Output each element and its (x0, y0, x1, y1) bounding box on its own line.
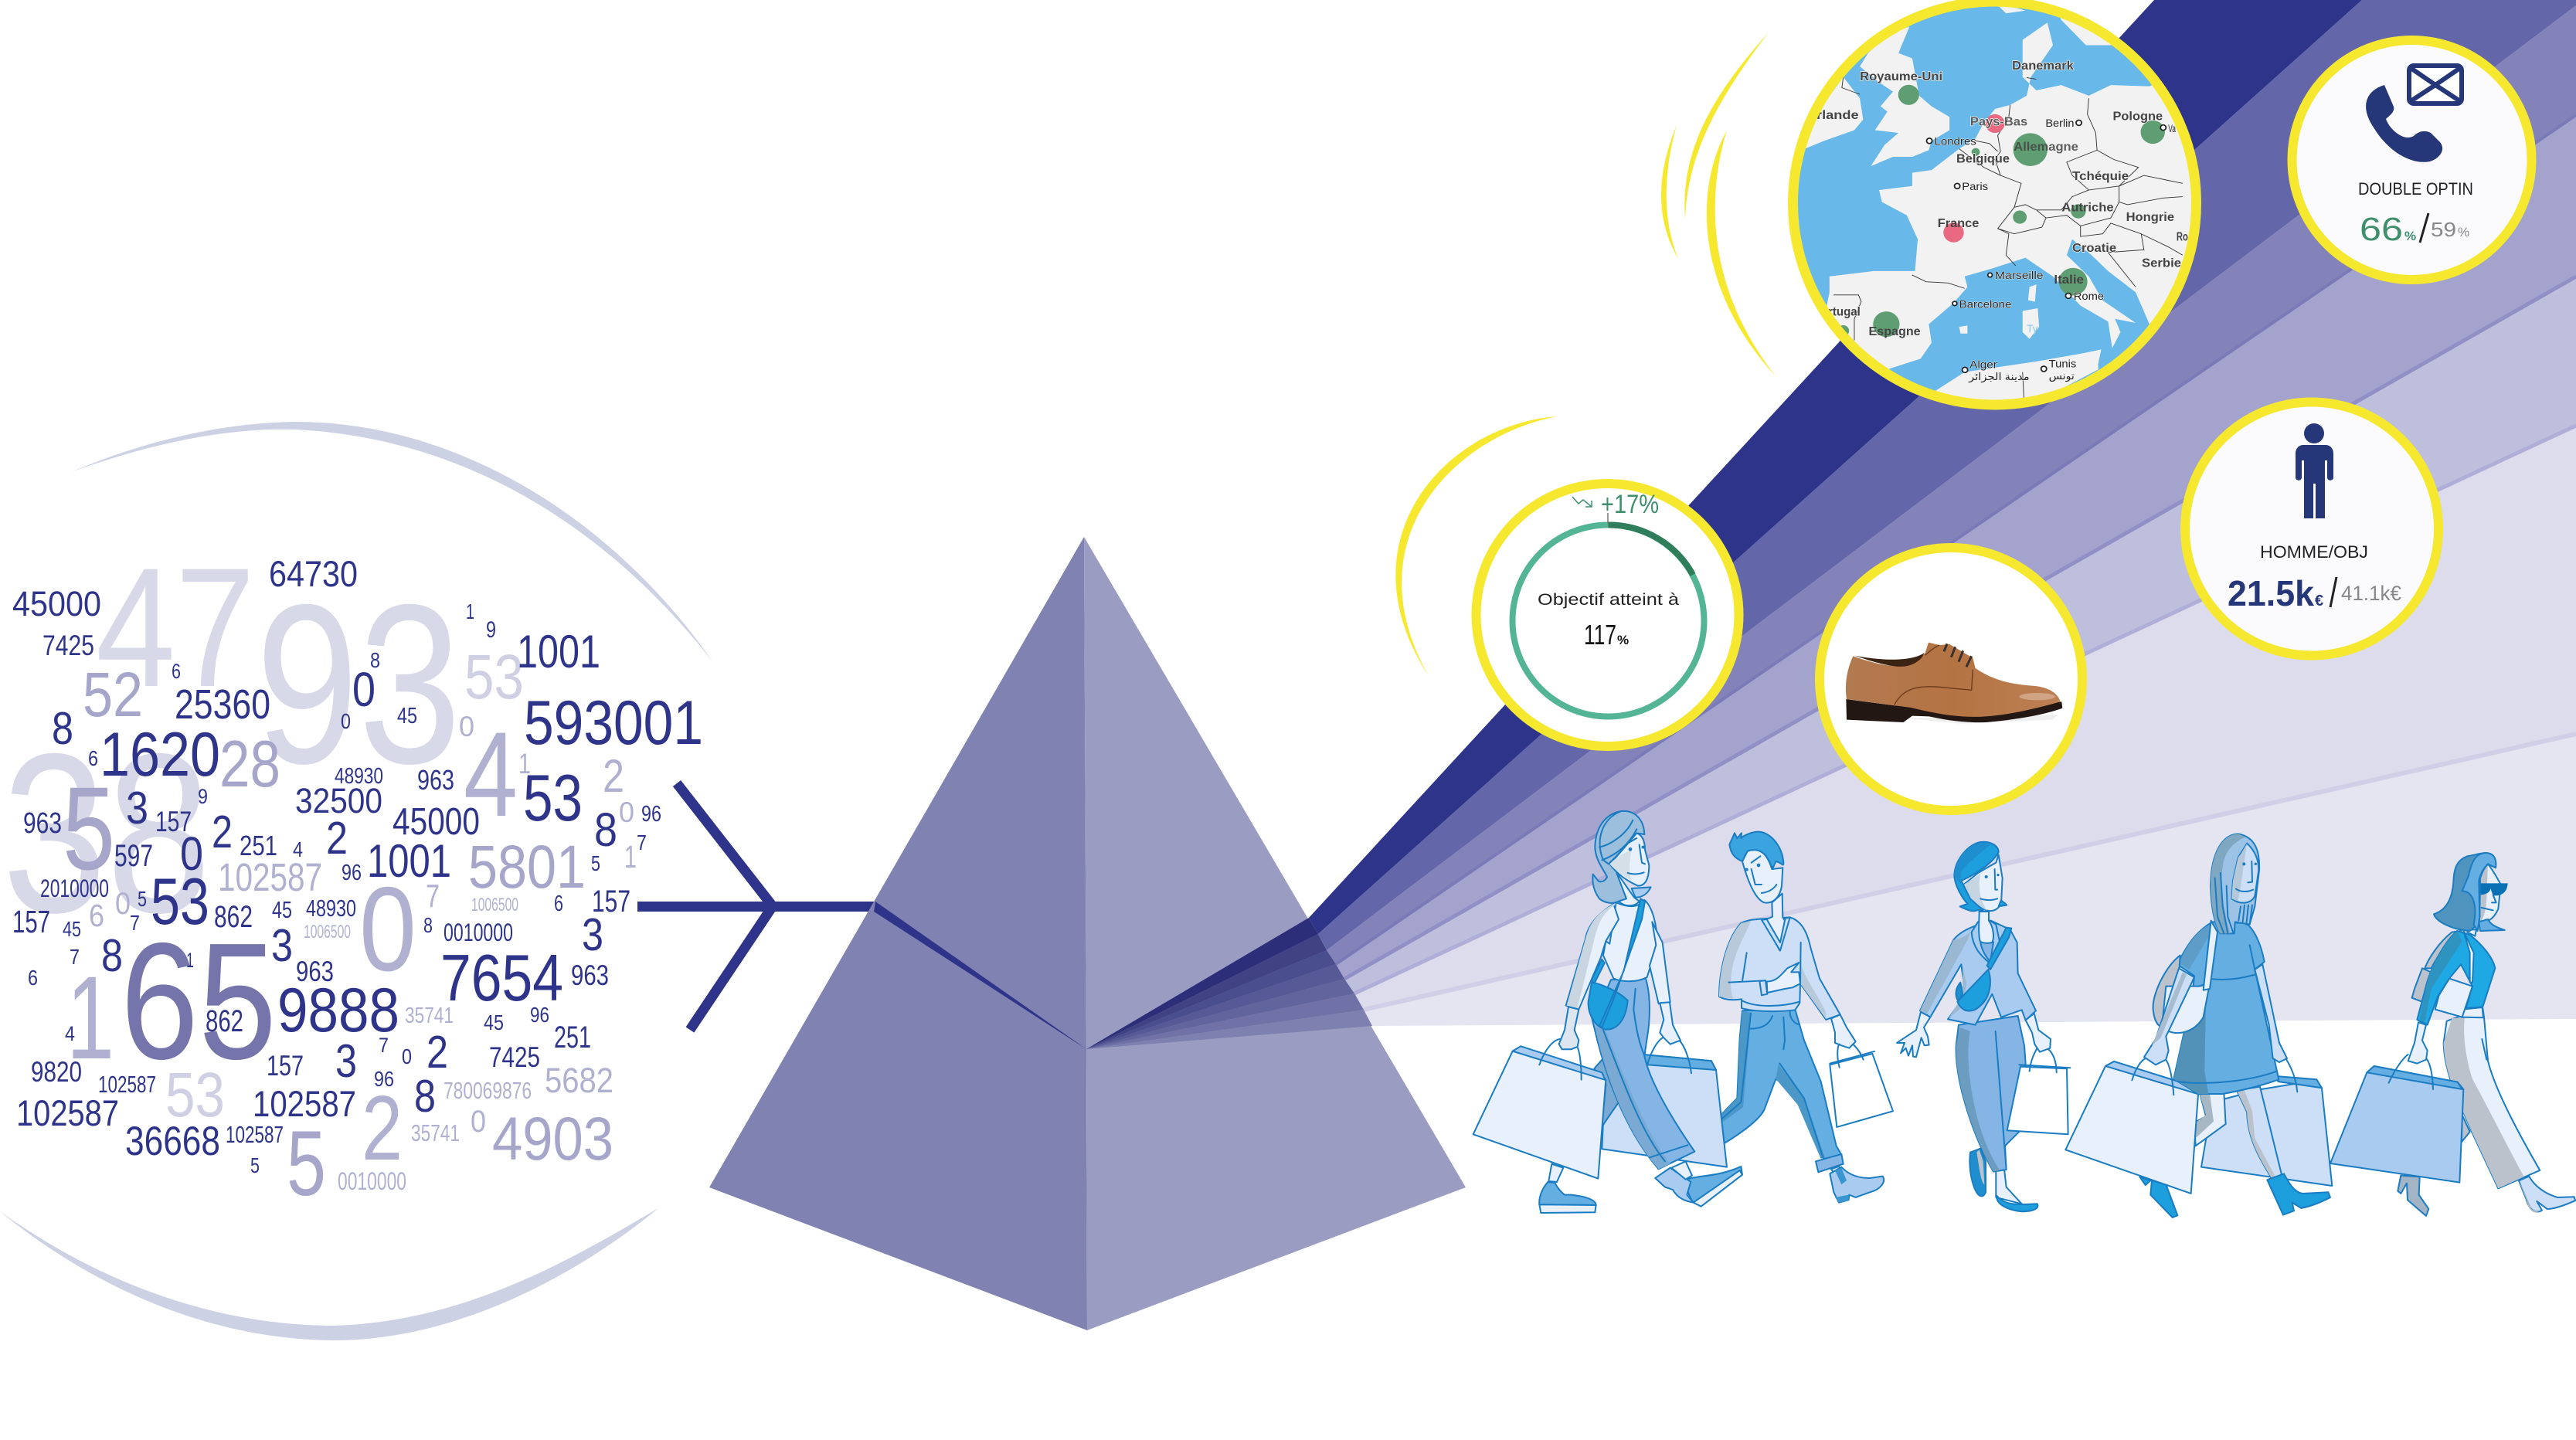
stat: double optin rates (2360, 211, 2469, 248)
number cloud: 96 (374, 1067, 394, 1091)
number cloud: 0 (459, 711, 474, 742)
trend icon (1572, 497, 1592, 507)
map of Europe (1806, 6, 2191, 400)
number cloud: 7 (426, 878, 440, 914)
stat: revenue per man: € (2315, 593, 2323, 610)
number cloud: 7 (379, 1034, 389, 1057)
number cloud: 0 (115, 887, 131, 921)
number cloud: 47 (96, 532, 255, 722)
number cloud: 45 (397, 704, 417, 728)
number cloud: 0 (471, 1105, 486, 1139)
number cloud: 45 (272, 896, 292, 923)
number cloud: 5 (591, 851, 600, 875)
number cloud: 251 (554, 1021, 591, 1055)
number cloud: 157 (267, 1050, 304, 1082)
number cloud: 102587 (16, 1092, 119, 1133)
stat: double optin rates: 66 (2360, 211, 2403, 248)
number cloud: 3 (582, 909, 603, 960)
number cloud: 1 (186, 949, 194, 972)
map labels: Serbie (2142, 256, 2181, 270)
number cloud: 1 (518, 748, 531, 779)
number cloud: 1001 (517, 626, 600, 678)
number cloud: 963 (296, 956, 334, 987)
number cloud: 48930 (306, 895, 356, 922)
icon: envelope (2409, 66, 2462, 104)
number cloud: 6 (554, 892, 563, 916)
label: objective: Objectif atteint à (1538, 591, 1679, 609)
number cloud: 0 (180, 827, 203, 880)
number cloud: 28 (219, 728, 280, 801)
map labels: Pays-Bas (1970, 115, 2027, 129)
stat: revenue per man: 21.5k (2228, 573, 2314, 613)
person 3: woman with white bag (1897, 842, 2070, 1211)
number cloud: 157 (12, 904, 50, 939)
number cloud: 8 (101, 930, 123, 981)
map labels: Royaume-Uni (1860, 70, 1942, 83)
stat: double optin rates: % (2404, 229, 2416, 243)
data bubbles (1837, 85, 2165, 337)
map labels: Croatie (2072, 241, 2116, 255)
number cloud: 102587 (253, 1083, 356, 1124)
number cloud: 45 (63, 917, 81, 941)
stat: double optin rates: 59 (2431, 218, 2456, 241)
arrow from data to pyramid (637, 783, 877, 1030)
number cloud: 157 (155, 806, 192, 837)
circle: shoe (1820, 548, 2082, 810)
number cloud: 8 (423, 913, 433, 937)
stat: 117%: % (1617, 633, 1629, 647)
number cloud: 64730 (269, 553, 358, 594)
map labels: France (1938, 216, 1979, 230)
number cloud: 5 (138, 887, 147, 911)
number cloud: 7654 (440, 942, 563, 1015)
number cloud: 4 (293, 837, 303, 861)
map labels: Ty (2027, 322, 2037, 335)
number cloud: 5801 (468, 832, 586, 901)
number cloud: 5 (63, 762, 115, 895)
number cloud: 45000 (12, 584, 101, 623)
number cloud: 6 (88, 746, 98, 770)
shoppers (1473, 811, 2575, 1218)
number cloud: 1006500 (304, 922, 351, 942)
stat: revenue per man (2228, 573, 2401, 613)
number cloud: 36668 (125, 1119, 220, 1164)
number cloud: 5 (287, 1112, 326, 1215)
number cloud: 6 (172, 660, 181, 683)
number cloud: 251 (240, 830, 277, 861)
person 4: woman in dress (2065, 834, 2332, 1218)
number cloud: 9 (486, 617, 496, 643)
number cloud: 53 (165, 1060, 225, 1130)
number cloud: 35741 (411, 1119, 460, 1146)
number cloud: 5682 (545, 1061, 613, 1100)
number cloud: 4 (65, 1022, 75, 1045)
top crescent of data sphere (71, 422, 712, 661)
number cloud: 3 (335, 1035, 357, 1087)
number cloud: 45000 (393, 801, 480, 843)
number cloud: 52 (83, 660, 143, 730)
number cloud: 1620 (100, 720, 220, 790)
number cloud: 6 (28, 966, 38, 990)
number cloud: 1 (66, 952, 114, 1084)
number cloud: 2 (603, 750, 624, 802)
map labels: Allemagne (2014, 140, 2078, 154)
number cloud: 7 (70, 945, 80, 969)
number cloud: 8 (594, 803, 617, 856)
map labels: Tchéquie (2072, 169, 2129, 183)
number cloud: 0 (359, 862, 416, 996)
number cloud: 8 (52, 703, 73, 754)
yellow motion arcs (1395, 32, 1776, 676)
number cloud: 0 (341, 709, 351, 733)
capital markers (1926, 120, 2166, 372)
map labels: Tunis (2049, 358, 2076, 369)
number cloud: 862 (206, 1004, 243, 1038)
number cloud: 8 (414, 1071, 436, 1122)
bottom crescent of data sphere (0, 1208, 658, 1340)
number cloud: 7425 (489, 1041, 540, 1073)
number cloud: 96 (530, 1003, 549, 1027)
icon: phone (2366, 85, 2442, 162)
number cloud: 7425 (42, 630, 94, 661)
number cloud: 2010000 (40, 875, 109, 902)
map labels: Marseille (1995, 269, 2044, 281)
number cloud: 102587 (98, 1071, 156, 1098)
number cloud: 5 (250, 1153, 260, 1177)
number cloud: 1 (466, 599, 474, 623)
number cloud: 4 (464, 708, 518, 842)
map labels: مدينة الجزائر (1968, 371, 2030, 383)
number cloud: 65 (121, 908, 277, 1094)
map labels: rtugal (1828, 305, 1861, 318)
number cloud: 1006500 (471, 895, 518, 915)
map labels: Barcelone (1959, 298, 2012, 310)
number cloud: 9888 (277, 976, 399, 1045)
number cloud: 32500 (295, 781, 382, 820)
number cloud: 102587 (218, 855, 322, 899)
number cloud: 0 (619, 796, 634, 828)
stat: double optin rates: % (2458, 225, 2469, 239)
number cloud: 35741 (405, 1004, 454, 1028)
number cloud: 9820 (31, 1056, 82, 1088)
stat: 117%: 117 (1584, 619, 1616, 650)
person 2: man with small bag (1719, 832, 1893, 1203)
circle: homme per objective (2185, 402, 2438, 655)
number cloud: 597 (114, 839, 153, 873)
number cloud: 0 (402, 1044, 412, 1068)
number cloud: 38 (2, 707, 211, 960)
number cloud: 53 (523, 762, 583, 835)
number cloud: 53 (464, 642, 524, 712)
number cloud: 593001 (524, 688, 703, 758)
map labels: Autriche (2061, 201, 2114, 214)
country borders (1833, 77, 2183, 399)
light rays fan (1309, 0, 2576, 1026)
number cloud: 2 (362, 1077, 403, 1180)
number cloud: 2 (212, 807, 233, 858)
number cloud: 1001 (367, 835, 451, 887)
stat: +17%: +17% (1601, 490, 1659, 519)
circle: double optin (2292, 40, 2531, 280)
circle: objective gauge (1476, 484, 1738, 746)
number cloud: 102587 (226, 1121, 284, 1148)
number cloud: 53 (151, 865, 209, 939)
number cloud: 96 (342, 861, 362, 885)
number cloud: 0 (352, 663, 376, 717)
icon: man (2296, 423, 2333, 518)
number cloud: 4903 (492, 1104, 613, 1173)
label: double optin: DOUBLE OPTIN (2358, 179, 2473, 199)
map labels: Danemark (2012, 59, 2074, 73)
number cloud: 8 (370, 648, 380, 672)
number cloud: 7 (130, 911, 140, 935)
map labels: Rome (2074, 290, 2104, 302)
number cloud: 3 (126, 783, 148, 834)
number cloud: 780069876 (443, 1077, 532, 1104)
map labels: Espagne (1869, 324, 1921, 338)
rays inside pyramid (1086, 918, 1372, 1049)
number cloud: 96 (641, 802, 661, 827)
gauge ring (1513, 513, 1704, 717)
map labels: Alger (1969, 358, 1997, 370)
map labels: تونس (2049, 370, 2075, 382)
number cloud: 2 (427, 1027, 448, 1078)
number cloud (2, 532, 703, 1215)
map labels: Hongrie (2126, 210, 2174, 224)
icon: brown shoe (1846, 643, 2062, 724)
number cloud: 0010000 (338, 1167, 406, 1195)
number cloud: 6 (89, 898, 104, 933)
person 1: woman with two bags (1473, 811, 1742, 1213)
number cloud: 48930 (335, 764, 383, 789)
map labels: Va (2168, 122, 2176, 134)
number cloud: 9 (198, 785, 208, 808)
map labels (1816, 59, 2188, 383)
number cloud: 7 (637, 830, 647, 854)
number cloud: 3 (271, 920, 293, 971)
number cloud: 2 (326, 813, 348, 864)
pyramid prism (709, 537, 1466, 1330)
number cloud: 963 (571, 959, 609, 991)
number cloud: 862 (214, 900, 253, 934)
number cloud: 93 (256, 558, 461, 811)
map labels: Paris (1962, 180, 1988, 192)
map labels: Pologne (2112, 110, 2163, 123)
map labels: Londres (1934, 135, 1976, 147)
beam inside pyramid (874, 902, 1086, 1049)
map labels: Belgique (1956, 152, 2010, 165)
number cloud: 963 (417, 764, 454, 796)
label: homme/obj: HOMME/OBJ (2260, 542, 2368, 562)
map labels: Ro (2177, 230, 2188, 243)
map labels: rlande (1816, 108, 1859, 122)
map labels: Italie (2054, 273, 2084, 287)
number cloud: 25360 (175, 681, 270, 728)
number cloud: 1 (624, 839, 637, 875)
number cloud: 963 (23, 807, 62, 840)
stat: revenue per man: 41.1k€ (2341, 582, 2401, 605)
person 5: woman with sunglasses (2330, 853, 2575, 1216)
number cloud: 157 (592, 885, 630, 919)
map circle (1793, 0, 2224, 415)
map labels: Berlin (2045, 117, 2074, 129)
number cloud: 45 (484, 1010, 504, 1034)
number cloud: 0010000 (443, 919, 513, 946)
